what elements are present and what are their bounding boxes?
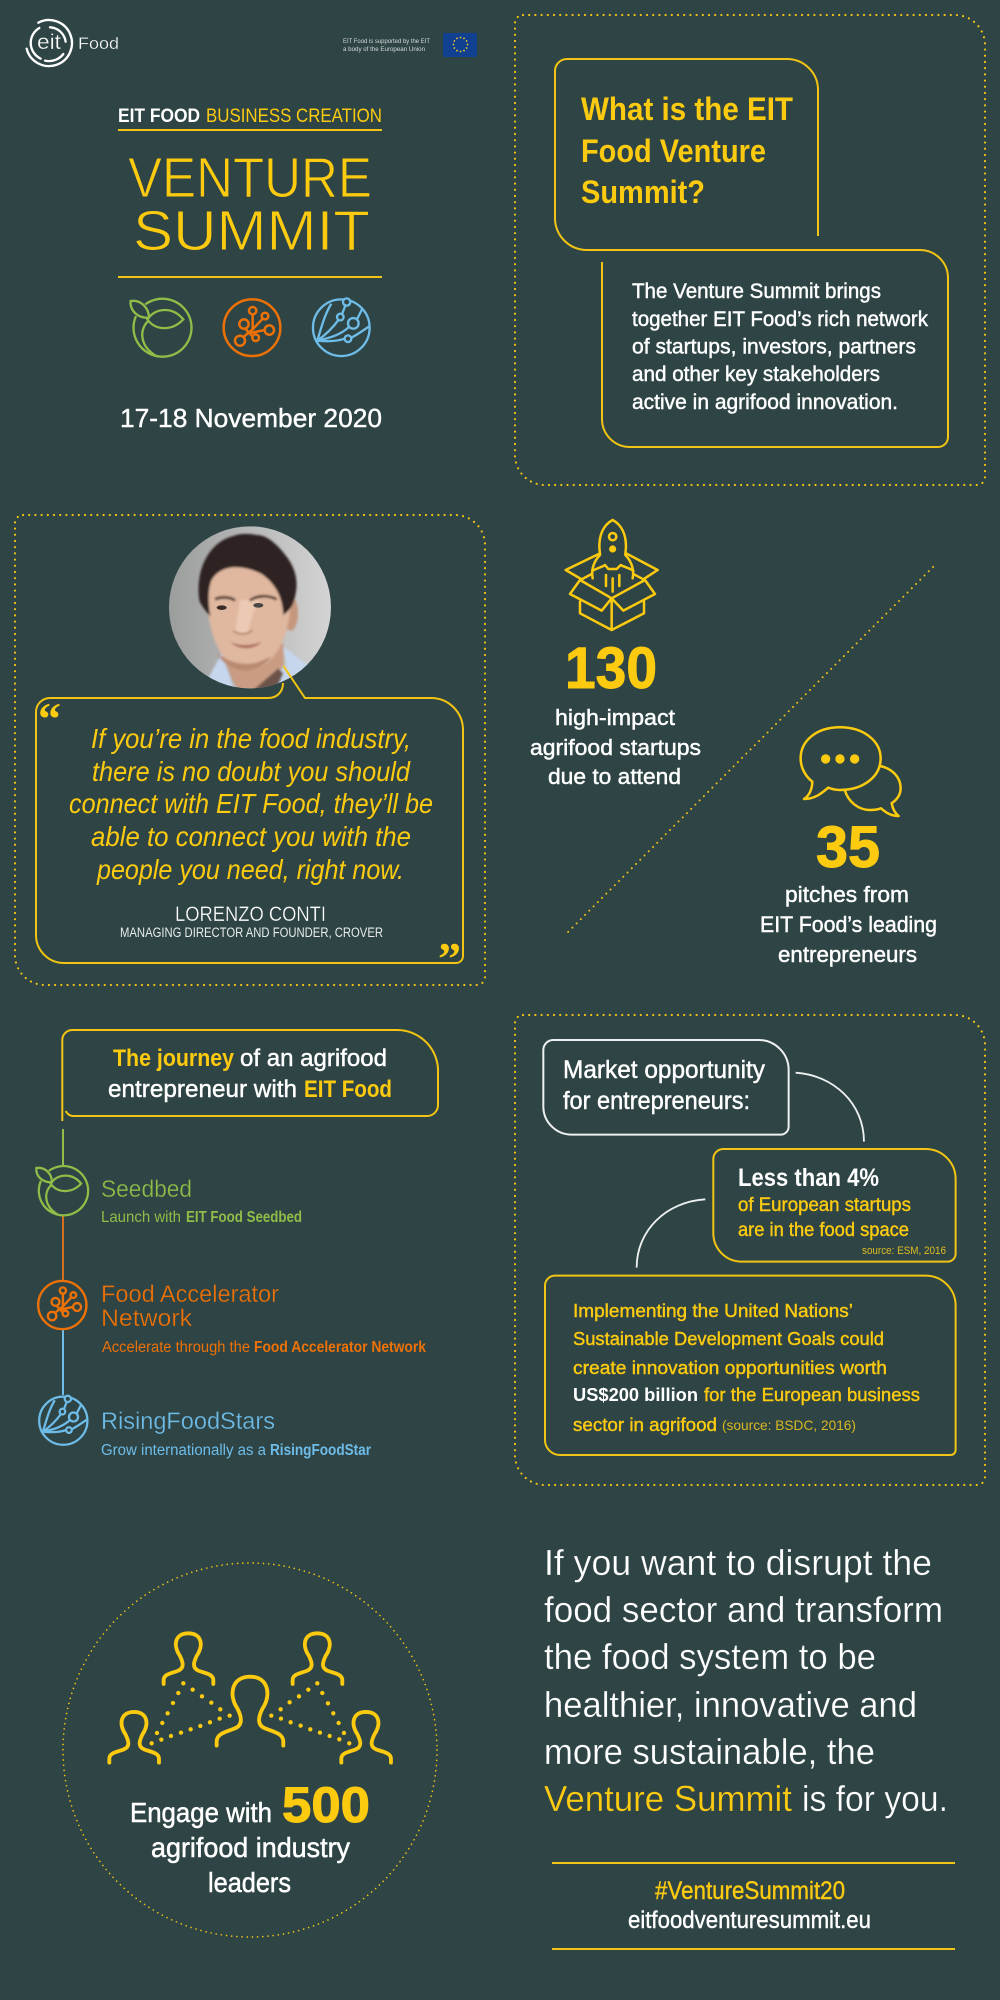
EU support statement: a body of the European Union (343, 46, 425, 53)
stat: 35 pitches (760, 727, 937, 967)
innovation opportunity box: for the European business (704, 1385, 920, 1405)
footer: hashtag and website: eitfoodventuresummit.eu (628, 1907, 871, 1934)
quote text (69, 723, 433, 885)
logo: EIT Food (27, 20, 119, 66)
description text: and other key stakeholders (632, 362, 880, 386)
icon: food accelerator network (38, 1281, 86, 1329)
step description (101, 1209, 302, 1226)
caption: engage with 500: agrifood industry (151, 1832, 350, 1863)
stat caption: high-impact (555, 705, 675, 730)
innovation opportunity box: Sustainable Development Goals could (573, 1329, 884, 1349)
innovation opportunity box: sector in agrifood (573, 1415, 717, 1435)
event date: 17-18 November 2020 (120, 403, 382, 433)
panel: engage with 500 leaders (63, 1563, 437, 1937)
caption: engage with 500: leaders (208, 1867, 291, 1898)
description text: of startups, investors, partners (632, 334, 916, 358)
statistic box: less than 4%: of European startups (738, 1194, 911, 1216)
number: 130: 130 (565, 636, 657, 701)
quote text: connect with EIT Food, they’ll be (69, 788, 433, 819)
call to action text (544, 1542, 948, 1819)
icon: connected people (109, 1633, 391, 1763)
caption: engage with 500: Engage with (130, 1797, 272, 1828)
timeline connector: accelerator (62, 1216, 64, 1280)
icon: seedbed (131, 299, 192, 357)
call to action text: food sector and transform (544, 1589, 943, 1630)
step description: Accelerate through the (102, 1339, 250, 1356)
call to action text: Venture Summit (544, 1778, 792, 1819)
step: Seedbed (36, 1166, 302, 1226)
number: 35: 35 (816, 815, 880, 880)
caption: engage with 500 (130, 1777, 370, 1898)
heading: Food Venture (581, 133, 766, 169)
quote speech bubble (36, 666, 463, 963)
panel: market opportunity (515, 1015, 985, 1485)
step: RisingFoodStars (39, 1396, 371, 1459)
icon: rising food stars (313, 298, 370, 356)
panel: testimonial (15, 515, 485, 985)
section: entrepreneur journey (36, 1030, 438, 1459)
journey heading box: of an agrifood (240, 1045, 387, 1072)
heading: Summit? (581, 174, 705, 210)
connector arrow to statistic (796, 1073, 864, 1142)
EU support statement (343, 38, 430, 53)
quote attribution: LORENZO CONTI (175, 903, 326, 926)
step title: Network (101, 1305, 193, 1332)
journey heading box: EIT Food (304, 1076, 392, 1103)
icon: closing quotation mark: ” (438, 933, 461, 984)
step description: Food Accelerator Network (254, 1339, 426, 1356)
step description: RisingFoodStar (270, 1442, 371, 1459)
description text: The Venture Summit brings (632, 279, 881, 303)
step title: Food Accelerator (101, 1281, 279, 1308)
quote text: there is no doubt you should (92, 756, 411, 787)
step title: Seedbed (101, 1176, 192, 1203)
eyebrow: EIT Food Business Creation: BUSINESS CREATION (206, 105, 382, 127)
market opportunity box: for entrepreneurs: (563, 1087, 750, 1115)
step description: EIT Food Seedbed (186, 1209, 302, 1226)
icon: food accelerator network (224, 299, 280, 356)
stat caption (530, 705, 701, 789)
stats section (530, 520, 937, 967)
logo: EIT Food: eit (37, 31, 61, 54)
stat caption: entrepreneurs (778, 942, 917, 967)
icon: opening quotation mark: “ (38, 693, 61, 744)
innovation opportunity box: Implementing the United Nations’ (573, 1301, 853, 1321)
stat caption: agrifood startups (530, 735, 701, 760)
market opportunity box (543, 1040, 789, 1135)
innovation opportunity box: (source: BSDC, 2016) (722, 1417, 856, 1433)
step: Food Accelerator Network (38, 1281, 426, 1356)
step title: RisingFoodStars (101, 1408, 275, 1435)
title: Venture Summit (128, 146, 372, 263)
step description (101, 1442, 371, 1459)
statistic box: less than 4%: Less than 4% (738, 1164, 879, 1192)
step description (102, 1339, 426, 1356)
statistic box: less than 4% (713, 1149, 956, 1262)
title: Venture Summit: VENTURE (128, 146, 372, 210)
icon: chat bubbles (801, 727, 901, 816)
step description: Launch with (101, 1209, 181, 1226)
innovation opportunity box: US$200 billion (573, 1385, 698, 1405)
call to action text: the food system to be (544, 1636, 876, 1677)
quote attribution (120, 903, 383, 940)
statistic box: less than 4%: are in the food space (738, 1219, 909, 1241)
icon: EU flag (443, 33, 477, 57)
footer: hashtag and website (552, 1862, 955, 1950)
journey heading box: The journey (113, 1045, 235, 1072)
call to action text: is for you. (802, 1778, 948, 1819)
step title (101, 1281, 279, 1332)
innovation opportunity box (545, 1276, 956, 1455)
stat caption: EIT Food’s leading (760, 912, 937, 937)
eyebrow: EIT Food Business Creation (118, 105, 382, 127)
portrait: Lorenzo Conti (169, 526, 331, 697)
timeline connector: rising stars (62, 1330, 64, 1395)
quote attribution: MANAGING DIRECTOR AND FOUNDER, CROVER (120, 925, 383, 940)
stat: 130 startups (530, 520, 701, 789)
caption: engage with 500: 500 (282, 1777, 370, 1833)
eyebrow: EIT Food Business Creation: EIT FOOD (118, 105, 200, 127)
header logos (27, 20, 477, 66)
description text: together EIT Food’s rich network (632, 307, 928, 331)
statistic box: less than 4%: source: ESM, 2016 (862, 1245, 946, 1257)
logo: EIT Food: Food (78, 34, 119, 53)
innovation opportunity box: create innovation opportunities worth (573, 1358, 887, 1378)
step description: Grow internationally as a (101, 1442, 266, 1459)
EU support statement: EIT Food is supported by the EIT (343, 38, 430, 45)
icon: rocket in box (566, 520, 658, 630)
footer: hashtag and website: #VentureSummit20 (655, 1877, 845, 1905)
call to action text: If you want to disrupt the (544, 1542, 932, 1583)
quote text: people you need, right now. (96, 854, 404, 885)
quote text: able to connect you with the (91, 821, 411, 852)
description text (632, 279, 928, 414)
market opportunity box: Market opportunity (563, 1056, 765, 1084)
call to action text: healthier, innovative and (544, 1684, 917, 1725)
call to action text: more sustainable, the (544, 1731, 875, 1772)
description text: active in agrifood innovation. (632, 390, 898, 414)
title block (118, 105, 382, 433)
connector arrow to innovation box (637, 1199, 705, 1268)
icon: rising food stars (39, 1396, 87, 1445)
quote text: If you’re in the food industry, (91, 723, 411, 754)
journey heading box: entrepreneur with (108, 1076, 297, 1103)
title: Venture Summit: SUMMIT (133, 199, 370, 263)
heading: What is the EIT (581, 91, 793, 127)
stat caption: due to attend (548, 764, 681, 789)
stat caption (760, 882, 937, 967)
journey heading box (62, 1030, 438, 1121)
heading (581, 91, 793, 210)
stat caption: pitches from (785, 882, 909, 907)
icon: seedbed (36, 1166, 88, 1215)
timeline connector: seedbed (62, 1129, 64, 1166)
panel: what is the EIT Food Venture Summit (515, 15, 985, 485)
